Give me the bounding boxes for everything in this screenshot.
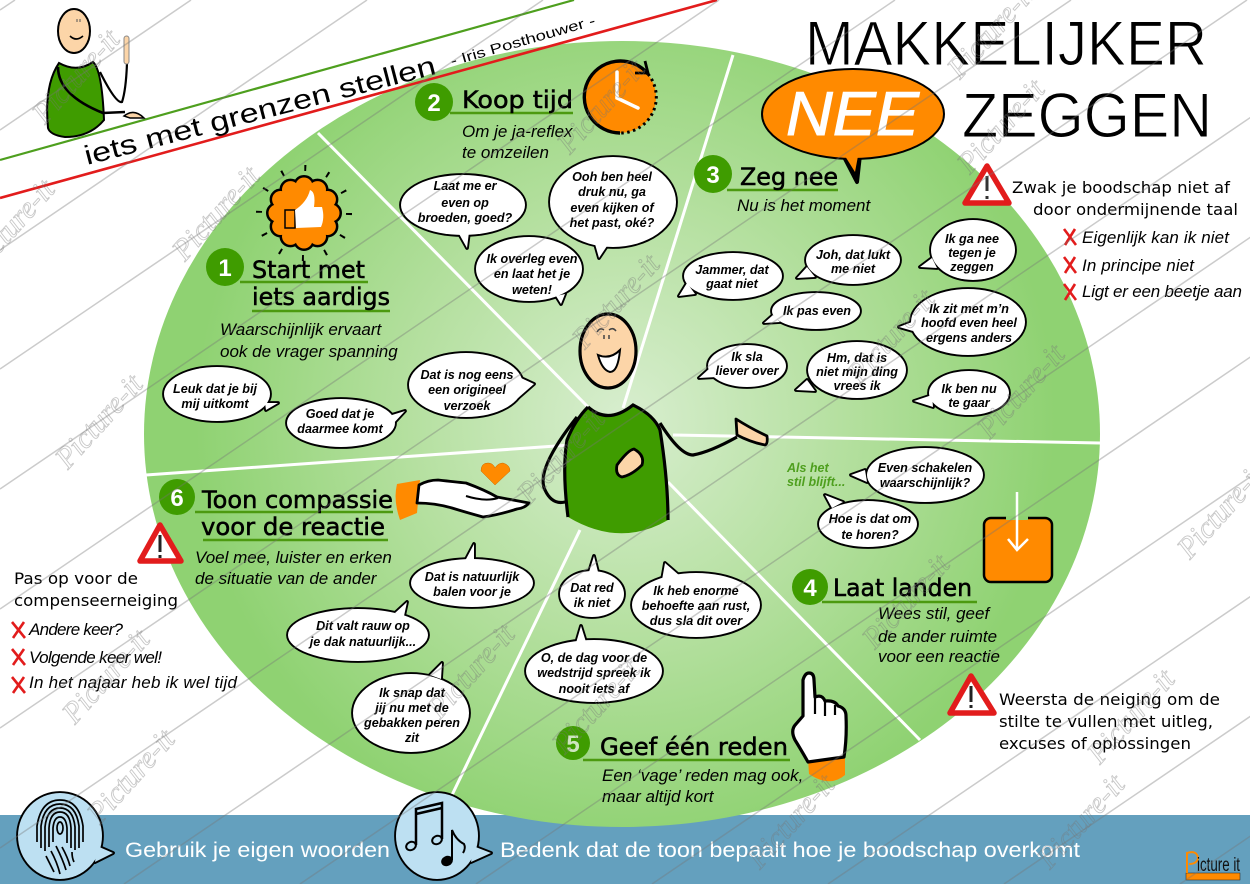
note: zwak je boodschap niet af: Zwak je boodschap niet af [1012, 178, 1230, 197]
note: weersta de neiging [999, 690, 1220, 753]
bubble: ik overleg even: weten! [512, 283, 552, 297]
bubble: de dag voor de wedstrijd: O, de dag voor de [541, 651, 647, 665]
bubble: ik zit met m'n hoofd: hoofd even heel [921, 316, 1017, 330]
bubble: jammer dat gaat niet: gaat niet [705, 277, 759, 291]
watermark stamps: Picture-it [25, 23, 127, 130]
bubble: hoe is dat om te horen: Hoe is dat om [829, 512, 911, 526]
bubble: dat is nog eens [409, 353, 534, 417]
title: makkelijker nee zeggen [805, 9, 1212, 151]
note: weersta de neiging: Weersta de neiging om de [999, 690, 1220, 709]
bubble: ik overleg even [476, 237, 582, 304]
bubble: joh dat lukt me niet: me niet [831, 262, 876, 276]
watermark stamps: Picture-it [165, 160, 267, 267]
bubble: ik heb enorme behoefte: behoefte aan rust, [642, 599, 750, 613]
note: pas op voor de compenseerneiging: compenseerneiging [14, 591, 178, 610]
text: bedenk dat de toon: Bedenk dat de toon bepaalt hoe je boodschap overkomt [500, 839, 1080, 862]
warning: compensatie [140, 525, 181, 561]
bubble: hoe is dat om te horen [819, 495, 917, 547]
warning: stilte [950, 676, 994, 713]
title: makkelijker nee zeggen: ZEGGEN [962, 81, 1212, 151]
watermark stamps: Picture-it [565, 248, 667, 355]
bubble: ik snap dat [353, 663, 469, 752]
step 1 heading: start met iets aardigs: Start met [252, 256, 365, 284]
step 4 heading: laat landen: Laat landen [833, 574, 972, 602]
banner: iets met grenzen stellen: iets met grenzen stellen [81, 51, 439, 171]
bubble: hm dat is niet mijn ding [796, 342, 906, 398]
bubble: ik heb enorme behoefte: Ik heb enorme [653, 584, 739, 598]
step 4 heading: laat landen [792, 569, 977, 605]
list: ondermijnende taal voorbeelden [1064, 228, 1242, 301]
step 6 heading: toon compassie: voor de reactie [201, 513, 385, 541]
watermark stamps: Picture-it [545, 653, 647, 760]
banner: iets met grenzen stellen [0, 0, 717, 198]
step 3 heading: zeg nee: Zeg nee [740, 163, 838, 191]
bubble: ik ben nu te gaar: Ik ben nu [941, 382, 997, 396]
bubble: joh dat lukt me niet: Joh, dat lukt [816, 248, 891, 262]
step 4 description: voor een reactie [878, 647, 1000, 666]
list: compensatie voorbeelden [12, 620, 238, 693]
central figure [543, 314, 767, 533]
bubble: dit valt rauw [288, 602, 428, 661]
step 4 label: als het stil blijft: stil blijft... [787, 475, 845, 489]
bubble: hoe is dat om te horen: te horen? [841, 528, 899, 542]
bubble: ik ga nee tegen je zeggen: tegen je [948, 246, 996, 260]
bubble: ooh ben heel druk [550, 157, 676, 258]
step 4 heading: laat landen: 4 [803, 575, 817, 602]
bubble: ik snap dat: jij nu met de [373, 701, 449, 715]
step 4 label: als het stil blijft: Als het [786, 461, 830, 475]
note: zwak je boodschap niet af [1012, 178, 1238, 219]
watermark stamps: Picture-it [855, 548, 957, 655]
icon: open hand with heart [396, 463, 529, 520]
list: ondermijnende taal voorbeelden: Eigenlijk kan ik niet [1082, 228, 1230, 247]
bubble: ik ben nu te gaar: te gaar [948, 396, 991, 410]
bubble: ik pas even [764, 293, 860, 329]
bubble: de dag voor de wedstrijd [526, 626, 662, 702]
bubble: jammer dat gaat niet: Jammer, dat [695, 263, 770, 277]
bubble: even schakelen: waarschijnlijk? [880, 476, 970, 490]
bubble: dit valt rauw: je dak natuurlijk... [308, 635, 416, 649]
list: ondermijnende taal voorbeelden: In principe niet [1082, 256, 1195, 275]
step 2 description: te omzeilen [462, 143, 549, 162]
step 5 heading: geef een reden: Geef één reden [600, 733, 788, 761]
bubble: ik snap dat: gebakken peren [363, 716, 460, 730]
bubble: dat red ik niet: Dat red [570, 581, 614, 595]
step 6 heading: toon compassie [159, 479, 393, 541]
bubble: laat me er even op broeden: Laat me er [434, 179, 498, 193]
bubble: ik zit met m'n hoofd [899, 289, 1025, 355]
step 2 heading: koop tijd [415, 83, 573, 121]
bubble: jammer dat gaat niet [679, 253, 782, 299]
icon: music notes bubble [396, 793, 491, 879]
watermark stamps: Picture-it [550, 53, 652, 160]
logo: picture it [1186, 852, 1240, 880]
watermark stamps: Picture-it [80, 723, 182, 830]
note: pas op voor de compenseerneiging [14, 569, 178, 610]
bubble: leuk dat je bij [164, 367, 278, 421]
bubble: dat is nog eens: Dat is nog eens [420, 368, 514, 382]
bubble: ik sla liever over: Ik sla [731, 350, 763, 364]
watermark stamps: Picture-it [950, 73, 1052, 180]
green circle panel [144, 41, 1100, 827]
watermark stamps: Picture-it [1080, 663, 1182, 770]
banner: iets met grenzen stellen: - Iris Posthouwer - [448, 12, 597, 69]
bubble: goed dat je daarmee komt: Goed dat je [306, 407, 374, 421]
bubble: ik heb enorme behoefte [632, 563, 760, 637]
step 6 heading: toon compassie: 6 [170, 485, 184, 512]
note: weersta de neiging: stilte te vullen met uitleg, [999, 712, 1213, 731]
bubble: dat is natuurlijk balen [411, 544, 533, 607]
watermark stamps: Picture-it [420, 618, 522, 725]
bubble: dat is natuurlijk balen: Dat is natuurlijk [425, 570, 520, 584]
note: zwak je boodschap niet af: door ondermijnende taal [1033, 200, 1238, 219]
step 2 description: Om je ja-reflex [462, 122, 573, 141]
bubble: ooh ben heel druk: even kijken of [570, 201, 655, 215]
watermark stamps: Picture-it [970, 338, 1072, 445]
step 1 heading: start met iets aardigs: 1 [218, 255, 232, 282]
step 1 heading: start met iets aardigs [206, 248, 390, 311]
bubble: ik zit met m'n hoofd: Ik zit met m’n [929, 302, 1009, 316]
step 2 heading: koop tijd: Koop tijd [462, 86, 573, 114]
bubble: ik ben nu te gaar [914, 371, 1009, 415]
bubble: ik pas even: Ik pas even [783, 304, 851, 318]
step 5 heading: geef een reden [556, 726, 790, 761]
bubble: ik snap dat: zit [404, 731, 420, 745]
bubble: ik zit met m'n hoofd: ergens anders [926, 331, 1012, 345]
bubble: dat is nog eens: een origineel [428, 383, 506, 397]
bubble: ik sla liever over: liever over [715, 364, 780, 378]
bubble: ik overleg even: Ik overleg even [486, 252, 578, 266]
bubble: even schakelen [851, 448, 983, 502]
bubble: dat red ik niet: ik niet [574, 596, 611, 610]
step 6 description: Voel mee, luister en erken [195, 548, 392, 567]
icon: fingerprint bubble [18, 793, 113, 879]
step 5 description: Een ‘vage’ reden mag ook, [602, 766, 803, 785]
bubble: joh dat lukt me niet [797, 236, 900, 284]
bubble: de dag voor de wedstrijd: wedstrijd spreek ik [537, 666, 652, 680]
watermark stamps: Picture-it [1030, 768, 1132, 875]
bubble: hm dat is niet mijn ding: Hm, dat is [827, 351, 887, 365]
bubble: ik heb enorme behoefte: dus sla dit over [650, 614, 743, 628]
icon: raised finger hand [793, 673, 846, 781]
text: gebruik je eigen woorden: Gebruik je eigen woorden [125, 839, 390, 862]
bubble: laat me er even op broeden: even op [441, 196, 489, 210]
bubble: hm dat is niet mijn ding: niet mijn ding [816, 365, 898, 379]
watermark stamps: Picture-it [740, 768, 842, 875]
step 5 description: maar altijd kort [602, 787, 715, 806]
step 3 description: Nu is het moment [737, 196, 871, 215]
list: compensatie voorbeelden: Volgende keer wel! [29, 648, 162, 667]
list: ondermijnende taal voorbeelden: Ligt er een beetje aan [1082, 282, 1242, 301]
icon: small figure raising hand [47, 9, 144, 137]
warning: ondermijnende taal [965, 166, 1009, 203]
bubble: ooh ben heel druk: druk nu, ga [578, 185, 646, 199]
bubble: ooh ben heel druk: Ooh ben heel [572, 170, 652, 184]
step 1 description: ook de vrager spanning [220, 342, 398, 361]
bubble: dat is natuurlijk balen: balen voor je [433, 585, 511, 599]
step 1 heading: start met iets aardigs: iets aardigs [252, 283, 390, 311]
bubble: dit valt rauw: Dit valt rauw op [316, 619, 410, 633]
watermark stamps: Picture-it [55, 623, 157, 730]
icon: landing box with arrow [984, 492, 1052, 582]
bubble: ik overleg even: en laat het je [494, 267, 570, 281]
bubble: ik sla liever over [699, 345, 786, 387]
bubble: ik ga nee tegen je zeggen: zeggen [949, 260, 994, 274]
bubble: even schakelen: Even schakelen [878, 461, 973, 475]
bubble: ik ga nee tegen je zeggen [920, 220, 1015, 280]
icon: clock [584, 61, 656, 133]
bubble: dat red ik niet [560, 556, 624, 617]
bubble: ik ga nee tegen je zeggen: Ik ga nee [945, 232, 999, 246]
step 4 description: de ander ruimte [878, 627, 997, 646]
note: pas op voor de compenseerneiging: Pas op voor de [14, 569, 138, 588]
bubble: ooh ben heel druk: het past, oké? [570, 216, 655, 230]
bottom bar background [0, 815, 1250, 884]
watermark stamps: Picture-it [48, 368, 150, 475]
bubble: goed dat je daarmee komt [287, 399, 405, 447]
step 1 description: Waarschijnlijk ervaart [220, 320, 383, 339]
bubble: leuk dat je bij: mij uitkomt [181, 397, 249, 411]
list: compensatie voorbeelden: In het najaar heb ik wel tijd [29, 673, 238, 692]
step 2 heading: koop tijd: 2 [427, 90, 441, 117]
step 4 description: Wees stil, geef [878, 604, 991, 623]
icon: thumbs up badge [259, 168, 349, 258]
step 6 description: de situatie van de ander [195, 569, 378, 588]
watermark stamps: Picture-it [510, 403, 612, 510]
title bubble: NEE: NEE [786, 80, 920, 149]
bubble: goed dat je daarmee komt: daarmee komt [297, 422, 383, 436]
step 6 heading: toon compassie: Toon compassie [201, 486, 393, 514]
title: makkelijker nee zeggen: MAKKELIJKER [805, 9, 1207, 79]
bubble: hm dat is niet mijn ding: vrees ik [834, 379, 881, 393]
bubble: laat me er even op broeden [401, 175, 525, 248]
bubble: de dag voor de wedstrijd: nooit iets af [559, 682, 631, 696]
bubble: laat me er even op broeden: broeden, goed? [418, 211, 513, 225]
step 3 heading: zeg nee [694, 155, 838, 193]
sector dividers [146, 55, 1100, 795]
list: compensatie voorbeelden: Andere keer? [28, 620, 124, 639]
step 3 heading: zeg nee: 3 [706, 162, 720, 189]
bubble: ik snap dat: Ik snap dat [379, 686, 446, 700]
note: weersta de neiging: excuses of oplossingen [999, 734, 1191, 753]
title bubble: NEE [763, 70, 943, 182]
bubble: leuk dat je bij: Leuk dat je bij [173, 382, 257, 396]
step 5 heading: geef een reden: 5 [566, 731, 580, 758]
watermark stamps: Picture-it [840, 283, 942, 390]
bubble: dat is nog eens: verzoek [444, 399, 491, 413]
